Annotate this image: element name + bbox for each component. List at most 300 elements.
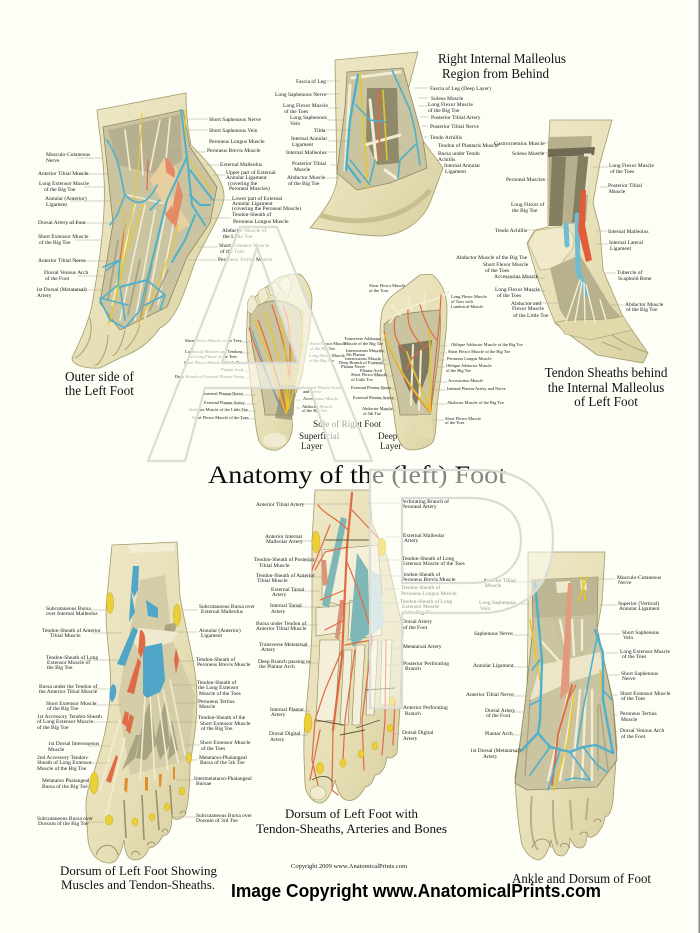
labels: outer side foot: of the Big Toe <box>44 186 76 193</box>
labels: outer side foot: (covering the <box>228 180 258 187</box>
labels: outer side foot: Short Extensor Muscle <box>38 234 89 240</box>
caption: right internal malleolus region from behind <box>438 51 566 81</box>
labels: dorsum arteries foot: of the Foot <box>403 624 428 631</box>
labels: ankle and dorsum foot: Vein <box>623 635 633 641</box>
labels: dorsum arteries foot: Tibial Muscle <box>257 578 288 584</box>
labels: ankle and dorsum foot: Peroneus Tertius <box>620 711 657 717</box>
labels: dorsum muscles foot: Subcutaneous Bursa over <box>37 816 93 822</box>
labels: sole deep layer: External Plantar Nerve <box>351 385 391 390</box>
labels: malleolus region: Ligament <box>292 142 314 148</box>
labels: sole deep layer: Long Flexor Muscle <box>451 294 487 299</box>
labels: dorsum muscles foot: Subcutaneous Bursa <box>46 606 91 612</box>
labels: sole deep layer: Peroneus Longus Muscle <box>447 356 491 361</box>
caption: outer side of the left foot <box>65 369 134 398</box>
illustration: outer side foot <box>72 93 224 368</box>
caption: sole of right foot: Layer <box>380 441 401 451</box>
labels: malleolus region: Internal Annular <box>444 163 480 169</box>
labels: dorsum muscles foot: Ligament <box>201 633 223 639</box>
labels: sole deep layer: Lumbrical Muscle <box>451 304 483 309</box>
labels: dorsum muscles foot: Tendon-Sheath of Anterior <box>42 627 101 634</box>
labels: outer side foot: 1st Dorsal (Metatarsal) <box>36 286 87 293</box>
labels: dorsum muscles foot: Peroneus Brevis Muscle <box>197 662 251 668</box>
labels: outer side foot: of the Foot <box>45 275 70 282</box>
labels: tendon sheaths foot: Posterior Tibial <box>608 183 643 189</box>
labels: dorsum arteries foot: Tendon-Sheath of Long <box>402 555 454 562</box>
labels: dorsum arteries foot: Posterior Perforating <box>403 660 449 667</box>
labels: dorsum muscles foot: the Long Extensor <box>198 685 239 691</box>
caption: dorsum of left foot showing muscles and tendon sheaths <box>60 864 218 892</box>
labels: sole deep layer: Short Flexor Muscle of the Big Toe <box>448 349 510 354</box>
labels: outer side foot: Short Saphenous Vein <box>209 128 258 134</box>
labels: dorsum muscles foot: of the Big Toe <box>37 724 69 731</box>
panel: ankle and dorsum of foot <box>466 552 671 886</box>
labels: ankle and dorsum foot: Plantar Arch <box>485 731 513 737</box>
labels: sole deep layer: of Toes with <box>451 299 474 304</box>
labels: sole superficial layer: Internal Plantar Artery <box>303 385 343 390</box>
labels: sole superficial layer: Accessorius Muscle <box>303 396 338 401</box>
labels: sole superficial layer: Short Flexor Muscle of Little Toe <box>184 360 243 365</box>
labels: sole deep layer: Interosseous Muscles <box>346 348 384 353</box>
labels: malleolus region: Tibia <box>314 128 326 134</box>
labels: malleolus region: Long Saphenous <box>290 115 327 121</box>
labels: sole deep layer: Accessorius Muscle <box>448 378 483 383</box>
labels: dorsum muscles foot: Bursae <box>196 781 212 787</box>
labels: dorsum arteries foot: Extensor Muscle <box>402 604 440 610</box>
labels: dorsum muscles foot: the Big Toe <box>47 665 73 671</box>
labels: tendon sheaths foot: Abductor and <box>511 301 541 307</box>
labels: malleolus region <box>275 78 499 187</box>
labels: dorsum arteries foot: Tendon-Sheath of Posterior <box>254 556 315 563</box>
labels: ankle and dorsum foot: Anterior Tibial Nerve <box>466 692 514 698</box>
labels: sole deep layer: Deep Branch of External <box>339 360 384 365</box>
labels: dorsum arteries foot: Bursa under Tendon of <box>256 620 307 627</box>
labels: outer side foot: Peroneus Tertius Muscle <box>218 257 273 263</box>
illustration: tendon sheaths foot <box>527 120 648 363</box>
labels: sole deep layer: Short Flexor Muscle <box>351 372 387 377</box>
labels: outer side foot: Dorsal Venous Arch <box>44 270 88 276</box>
labels: sole deep layer: Interosseous Muscle <box>345 356 381 361</box>
caption: dorsum of left foot with tendon sheaths, arteries and bones: Tendon-Sheaths, Arteries and Bones <box>256 822 447 836</box>
labels: ankle and dorsum foot: Annular Ligament <box>619 606 660 612</box>
labels: tendon sheaths foot: Abductor Muscle of the Big Toe <box>456 254 528 261</box>
panel: sole of right foot <box>175 274 523 451</box>
labels: dorsum arteries foot: Internal Plantar <box>270 707 304 713</box>
labels: sole deep layer: 5th Plantar <box>346 352 366 357</box>
labels: sole deep layer: Muscle of the Big Toe <box>344 341 383 346</box>
labels: tendon sheaths foot: Flexor Muscle <box>512 306 544 312</box>
labels: tendon sheaths foot: Long Flexor Muscle <box>495 287 540 293</box>
labels: dorsum muscles foot: Sheath of Long Extensor <box>37 759 92 766</box>
labels: sole deep layer: of the Toes <box>445 420 465 425</box>
labels: malleolus region: Long Saphenous Nerve <box>275 92 327 98</box>
caption: sole of right foot: Deep <box>378 431 398 441</box>
main title: Anatomy of the (left) Foot <box>208 460 506 489</box>
image copyright banner: Image Copyright www.AnatomicalPrints.com <box>231 880 601 901</box>
labels: sole superficial layer: External Plantar Artery <box>204 400 246 405</box>
labels: dorsum muscles foot: 2nd Accessory Tendon- <box>37 755 89 761</box>
labels: sole superficial layer: of Long Flexor of the Toes <box>190 354 237 359</box>
labels: dorsum arteries foot: Extensor Muscle of the Toes <box>402 560 465 567</box>
labels: dorsum muscles foot: Metatarso Phalangeal <box>42 778 90 784</box>
labels: ankle and dorsum foot: Long Saphenous <box>479 600 516 606</box>
labels: malleolus region: Tendo Achillis <box>430 135 462 141</box>
labels: outer side foot: Peroneus Brevis Muscle <box>207 148 261 154</box>
labels: outer side foot: Nerve <box>46 158 60 164</box>
labels: dorsum muscles foot: Short Extensor Muscle <box>46 701 97 707</box>
labels: dorsum arteries foot: Branch <box>405 666 421 672</box>
labels: sole deep layer: of the Toes <box>369 288 389 293</box>
labels: dorsum arteries foot: Dorsal Digital <box>402 730 434 736</box>
labels: dorsum arteries foot: Internal Tarsal <box>270 603 302 609</box>
labels: ankle and dorsum foot: of the Toes <box>622 653 646 660</box>
panel: tendon sheaths behind the internal malleolus <box>456 120 668 409</box>
labels: ankle and dorsum foot: Nerve <box>622 676 636 682</box>
labels: ankle and dorsum foot: Long Extensor Muscle <box>620 649 671 655</box>
caption: ankle and dorsum of foot: Ankle and Dorsum of Foot <box>512 871 651 886</box>
labels: dorsum muscles foot: Intermetatarso-Phalangeal <box>194 776 252 782</box>
labels: dorsum muscles foot: Dorsum of 3rd Toe <box>196 817 238 824</box>
labels: tendon sheaths foot: Internal Lateral <box>609 240 644 246</box>
labels: sole superficial layer: Deep Branch of External Plantar Nerve <box>175 374 244 379</box>
labels: outer side foot: Upper part of External <box>226 169 276 176</box>
labels: malleolus region: Posterior Tibial Artery <box>431 115 481 121</box>
labels: ankle and dorsum foot: Short Extensor Muscle <box>620 691 671 697</box>
labels: tendon sheaths foot: of the Big Toe <box>626 306 658 313</box>
labels: outer side foot: Tendon-Sheath of <box>232 211 271 218</box>
labels: outer side foot: Annular (Anterior) <box>45 195 87 202</box>
caption: dorsum of left foot showing muscles and tendon sheaths: Muscles and Tendon-Sheaths. <box>61 878 215 892</box>
labels: ankle and dorsum foot: 1st Dorsal (Metatarsal) <box>470 747 521 754</box>
caption: sole of right foot: Superficial <box>299 431 340 441</box>
labels: sole deep layer: Oblique Adductor Muscle of the Big Toe <box>451 342 523 347</box>
labels: dorsum muscles foot: Subcutaneous Bursa over <box>196 813 252 819</box>
labels: dorsum arteries foot: Peroneal Artery <box>402 504 437 510</box>
labels: dorsum arteries foot: Metatarsal Artery <box>403 644 442 650</box>
watermark: AP logo <box>148 227 553 708</box>
labels: outer side foot: Anterior Tibial Muscle <box>38 171 89 177</box>
labels: outer side foot: Lower part of External <box>232 195 283 202</box>
labels: malleolus region: Internal Malleolus <box>286 150 326 156</box>
labels: dorsum arteries foot: Anterior Tibial Muscle <box>256 626 307 632</box>
caption: outer side of the left foot: Outer side of <box>65 369 134 384</box>
panel: right internal malleolus region <box>275 51 566 236</box>
labels: dorsum arteries foot: Artery <box>272 592 287 598</box>
labels: dorsum arteries foot: of the Big Toe <box>402 609 434 616</box>
labels: dorsum muscles foot: Tendon-Sheath of <box>196 656 235 663</box>
labels: dorsum muscles foot: Tibial Muscle <box>50 633 81 639</box>
labels: dorsum muscles foot: Tendon-Sheath of the <box>198 714 246 721</box>
labels: dorsum muscles foot: of the Big Toe <box>201 725 233 732</box>
labels: tendon sheaths foot: Short Flexor Muscle <box>483 262 529 268</box>
labels: malleolus region: Ligament <box>445 169 467 175</box>
labels: dorsum muscles foot: Bursa under the Tendon of <box>39 683 98 690</box>
labels: dorsum muscles foot: Annular (Anterior) <box>199 627 241 634</box>
labels: sole deep layer: Internal Plantar Artery and Nerve <box>447 386 506 391</box>
labels: dorsum muscles foot: Muscle <box>199 704 216 710</box>
labels: outer side foot: of the Big Toe <box>39 239 71 246</box>
labels: sole deep layer: Short Flexor Muscle <box>369 283 405 288</box>
labels: outer side foot: Artery <box>37 293 52 299</box>
labels: ankle and dorsum foot: Short Saphenous <box>621 671 658 677</box>
labels: outer side foot <box>36 117 301 299</box>
labels: tendon sheaths foot: of the Toes <box>497 292 521 299</box>
labels: dorsum muscles foot: Muscle of the Toes <box>199 690 241 697</box>
labels: sole superficial layer: and Nerve <box>303 389 321 394</box>
caption: sole of right foot: Layer <box>301 441 322 451</box>
labels: dorsum arteries foot: Peroneus Brevis Muscle <box>402 577 456 583</box>
caption: right internal malleolus region from behind: Region from Behind <box>442 66 549 81</box>
labels: tendon sheaths foot: Tendo Achillis <box>495 228 527 234</box>
labels: dorsum arteries foot: Dorsal Artery <box>402 619 432 625</box>
labels: dorsum muscles foot: Subcutaneous Bursa over <box>199 604 255 610</box>
illustration: deep layer sole <box>380 274 449 450</box>
labels: ankle and dorsum foot <box>466 575 671 760</box>
labels: ankle and dorsum foot: Dorsal Artery <box>485 708 515 714</box>
labels: ankle and dorsum foot: Artery <box>483 754 498 760</box>
labels: ankle and dorsum foot: Saphenous Nerve <box>474 631 513 637</box>
labels: tendon sheaths foot: of the Little Toe <box>513 312 549 319</box>
labels: tendon sheaths foot: Gastrocnemius Muscle <box>494 141 545 147</box>
labels: dorsum arteries foot: Peroneus Longus Muscle <box>401 591 457 597</box>
panel: outer side of the left foot <box>36 93 301 398</box>
labels: outer side foot: Peroneus Longus Muscle <box>233 219 289 225</box>
labels: ankle and dorsum foot: Vein <box>480 606 490 612</box>
labels: sole superficial layer: Plantar Arch <box>221 367 244 372</box>
labels: outer side foot: Short Extensor Muscle <box>219 243 270 249</box>
labels: ankle and dorsum foot: Superior (Vertical) <box>618 600 659 607</box>
labels: dorsum arteries foot: External Tarsal <box>271 587 305 593</box>
labels: dorsum muscles foot: 1st Accessory Tendon-Sheath <box>37 714 102 720</box>
labels: sole superficial layer: of the Big Toe <box>309 358 334 363</box>
labels: dorsum muscles foot: Extensor Muscle of <box>47 659 90 666</box>
labels: outer side foot: Short Saphenous Nerve <box>209 117 261 123</box>
caption: dorsum of left foot with tendon sheaths, arteries and bones: Dorsum of Left Foot with <box>285 807 419 821</box>
labels: malleolus region: Achillis <box>438 157 455 163</box>
labels: sole deep layer: Plantar Nerve <box>341 364 365 369</box>
labels: malleolus region: Tendon of Plantaris Muscle <box>438 142 499 149</box>
labels: sole superficial layer: Abductor Muscle <box>302 404 333 409</box>
labels: tendon sheaths foot: Ligament <box>610 246 632 252</box>
labels: malleolus region: Abductor Muscle <box>287 175 326 181</box>
labels: sole superficial layer: Abductor Muscle of the Little Toe <box>188 407 248 412</box>
labels: sole superficial layer: Long Flexor Muscle <box>309 353 345 358</box>
labels: dorsum muscles foot: Tendon-Sheath of <box>197 679 236 686</box>
labels: ankle and dorsum foot: of the Foot <box>486 712 511 719</box>
caption: right internal malleolus region from behind: Right Internal Malleolus <box>438 51 566 66</box>
labels: outer side foot: Peroneal Muscles) <box>229 185 270 192</box>
labels: tendon sheaths foot: Muscle <box>609 189 626 195</box>
labels: outer side foot: (covering the Peroneal Muscle) <box>232 205 301 212</box>
caption: tendon sheaths behind the internal malleolus <box>545 365 668 409</box>
labels: tendon sheaths foot: Internal Malleolus <box>608 229 648 235</box>
labels: dorsum arteries foot: Artery <box>271 712 286 718</box>
labels: malleolus region: Internal Annular <box>291 136 327 142</box>
labels: tendon sheaths foot: of the Toes <box>610 168 634 175</box>
labels: sole deep layer: Abductor Muscle <box>362 406 393 411</box>
caption: tendon sheaths behind the internal malleolus: of Left Foot <box>574 394 638 409</box>
labels: dorsum arteries foot: Deep Branch passing to <box>258 659 311 665</box>
labels: dorsum muscles foot: Bursa of the Big Toe <box>42 783 88 790</box>
labels: sole deep layer: Abductor Muscle of the Big Toe <box>447 400 504 405</box>
labels: ankle and dorsum foot: Short Saphenous <box>622 630 659 636</box>
labels: dorsum muscles foot: Tendon-Sheath of Long <box>46 654 98 661</box>
labels: dorsum arteries foot <box>254 498 465 743</box>
labels: sole superficial layer: Short Flexor Muscle of the Toes <box>192 415 249 420</box>
labels: malleolus region: Bursa under Tendo <box>438 151 480 157</box>
panel: dorsum of left foot with tendon sheaths, arteries and bones <box>254 490 465 836</box>
labels: dorsum arteries foot: Malleolar Artery <box>266 539 303 545</box>
labels: ankle and dorsum foot: Annular Ligament <box>473 663 514 669</box>
labels: dorsum arteries foot: Artery <box>270 737 285 743</box>
labels: malleolus region: Posterior Tibial <box>292 161 327 167</box>
labels: dorsum arteries foot: Tibial Muscle <box>259 563 290 569</box>
labels: dorsum muscles foot: Dorsum of the Big Toe <box>38 820 89 827</box>
labels: outer side foot: Annular Ligament <box>226 175 267 181</box>
labels: sole deep layer: Plantar Arch <box>360 368 383 373</box>
labels: dorsum muscles foot: 1st Dorsal Interosseous <box>48 741 99 747</box>
illustration: dorsum arteries foot <box>304 490 403 803</box>
caption: tendon sheaths behind the internal malleolus: the Internal Malleolus <box>548 380 664 395</box>
labels: dorsum arteries foot: External Malleolar <box>403 533 445 539</box>
illustration: superficial layer sole <box>247 274 312 450</box>
labels: malleolus region: Muscle <box>294 167 311 173</box>
labels: sole deep layer: Oblique Adductor Muscle <box>446 363 492 368</box>
labels: dorsum muscles foot: Short Extensor Muscle <box>200 740 251 746</box>
labels: dorsum muscles foot: Muscle <box>48 747 65 753</box>
labels: outer side foot: Long Extensor Muscle <box>39 181 90 187</box>
caption: dorsum of left foot with tendon sheaths, arteries and bones <box>256 807 447 836</box>
labels: malleolus region: Vein <box>290 121 300 127</box>
labels: malleolus region: of the Big Toe <box>428 107 460 114</box>
labels: outer side foot: Ligament <box>46 202 68 208</box>
labels: dorsum muscles foot: of the Big Toe <box>47 705 79 712</box>
labels: sole deep layer: Short Flexor Muscle <box>445 416 481 421</box>
labels: malleolus region: Long Flexor Muscle <box>283 103 328 109</box>
labels: tendon sheaths foot: of the Toes <box>485 267 509 274</box>
illustration: malleolus region <box>310 52 443 236</box>
labels: dorsum muscles foot: of the Toes <box>201 745 225 752</box>
labels: tendon sheaths foot: Long Flexor of <box>511 201 544 208</box>
labels: tendon sheaths foot: Accessorius Muscle <box>494 274 539 280</box>
labels: dorsum muscles foot: Metatarso-Phalangeal <box>199 755 247 761</box>
labels: dorsum arteries foot: Tendon-Sheath of <box>401 571 440 578</box>
labels: ankle and dorsum foot: Anterior Tibial <box>483 578 516 584</box>
labels: dorsum arteries foot: Artery <box>403 736 418 742</box>
labels: malleolus region: of the Big Toe <box>288 180 320 187</box>
labels: sole deep layer: of 5th Toe <box>363 411 381 416</box>
labels: sole deep layer <box>339 283 523 425</box>
caption: sole of right foot: Sole of Right Foot <box>313 419 382 429</box>
labels: ankle and dorsum foot: Dorsal Venous Arch <box>620 728 664 734</box>
labels: dorsum muscles foot: Short Extensor Muscle <box>200 721 251 727</box>
labels: outer side foot: Anterior Tibial Nerve <box>38 258 86 264</box>
caption: dorsum of left foot showing muscles and tendon sheaths: Dorsum of Left Foot Showing <box>60 864 218 878</box>
labels: tendon sheaths foot: Abductor Muscle <box>625 302 664 308</box>
labels: dorsum arteries foot: Perforating Branch of <box>401 498 449 505</box>
labels: dorsum arteries foot: Artery <box>261 647 276 653</box>
labels: sole superficial layer: Short Flexor Muscle <box>310 341 346 346</box>
labels: dorsum arteries foot: Tendon-Sheath of Anterior <box>256 572 315 579</box>
labels: ankle and dorsum foot: Musculo-Cutaneous <box>617 575 661 581</box>
labels: tendon sheaths foot: Long Flexor Muscle <box>609 163 654 169</box>
labels: sole superficial layer: Short Flexor Muscle of the Toes <box>185 338 242 343</box>
labels: dorsum arteries foot: Anterior Perforating <box>403 704 448 711</box>
labels: outer side foot: Peroneus Longus Muscle <box>209 139 265 145</box>
labels: tendon sheaths foot: Peroneal Muscles <box>506 177 545 183</box>
labels: outer side foot: Dorsal Artery of Foot <box>38 219 86 226</box>
labels: outer side foot: the Little Toe <box>223 234 253 240</box>
labels: dorsum muscles foot: over Internal Malleolus <box>46 611 98 617</box>
labels: sole deep layer: External Plantar Artery <box>353 395 395 400</box>
caption: sole of right foot <box>299 419 401 451</box>
labels: malleolus region: Fascia of Leg <box>296 78 326 85</box>
labels: malleolus region: Long Flexor Muscle <box>428 102 473 108</box>
caption: tendon sheaths behind the internal malleolus: Tendon Sheaths behind <box>545 365 668 380</box>
labels: dorsum arteries foot: Anterior Internal <box>265 534 303 540</box>
labels: ankle and dorsum foot: Muscle <box>485 583 502 589</box>
labels: dorsum muscles foot: Bursa of the 5th Toe <box>200 759 245 766</box>
labels: tendon sheaths foot: Tubercle of <box>617 269 642 276</box>
labels: dorsum arteries foot: Tendon-Sheath of <box>401 584 440 591</box>
labels: tendon sheaths foot: the Big Toe <box>512 208 538 214</box>
labels: malleolus region: Soleus Muscle <box>431 96 464 102</box>
labels: dorsum arteries foot: Artery <box>404 538 419 544</box>
labels: dorsum arteries foot: Anterior Tibial Artery <box>256 502 305 508</box>
labels: malleolus region: Fascia of Leg (Deep Layer) <box>430 85 491 92</box>
panel: dorsum of left foot showing muscles and tendon sheaths <box>37 542 255 892</box>
labels: sole superficial layer: of the Big Toe <box>310 346 335 351</box>
labels: sole superficial layer: Internal Plantar Nerve <box>204 391 243 396</box>
labels: outer side foot: External Malleolus <box>220 162 262 168</box>
labels: tendon sheaths foot: Scaphoid Bone <box>618 276 652 282</box>
labels: dorsum muscles foot: the Anterior Tibial Muscle <box>39 689 98 695</box>
labels: dorsum arteries foot: the Plantar Arch <box>259 664 295 670</box>
labels: malleolus region: of the Toes <box>284 108 308 115</box>
labels: ankle and dorsum foot: Muscle <box>621 717 638 723</box>
labels: ankle and dorsum foot: Nerve <box>618 580 632 586</box>
labels: malleolus region: Posterior Tibial Nerve <box>430 124 479 130</box>
labels: sole superficial layer <box>175 338 346 420</box>
labels: dorsum arteries foot: Tendon-Sheath of Long <box>400 598 452 605</box>
labels: outer side foot: of the Toes <box>220 248 244 255</box>
labels: dorsum arteries foot: Transverse Metatarsal <box>259 642 308 648</box>
caption: outer side of the left foot: the Left Foot <box>65 383 134 398</box>
labels: dorsum muscles foot <box>37 604 255 827</box>
copyright line: Copyright 2009 www.AnatomicalPrints.com <box>291 863 407 870</box>
labels: dorsum muscles foot: Muscle of the Big Toe <box>37 765 87 772</box>
labels: ankle and dorsum foot: of the Toes <box>621 695 645 702</box>
illustration: dorsum muscles foot <box>86 542 197 863</box>
labels: sole superficial layer: Lumbrical Muscles and Tendons <box>185 349 243 354</box>
labels: outer side foot: Annular Ligament <box>232 201 273 207</box>
labels: outer side foot: Musculo-Cutaneous <box>46 152 90 158</box>
labels: sole deep layer: of the Big Toe <box>446 368 471 373</box>
labels: tendon sheaths foot: Soleus Muscle <box>512 151 545 157</box>
labels: dorsum arteries foot: Branch <box>405 711 421 717</box>
labels: dorsum arteries foot: Dorsal Digital <box>269 731 301 737</box>
labels: outer side foot: Abductor Muscle of <box>222 227 266 234</box>
labels: sole superficial layer: of the Big Toe <box>302 408 327 413</box>
labels: ankle and dorsum foot: of the Foot <box>621 733 646 740</box>
labels: tendon sheaths foot <box>456 141 664 319</box>
labels: dorsum muscles foot: Peroneus Tertius <box>198 699 235 705</box>
labels: dorsum muscles foot: of Long Extensor Muscle <box>37 718 94 725</box>
illustration: ankle and dorsum foot <box>515 552 617 860</box>
labels: sole deep layer: Transverse Adductor <box>344 336 381 341</box>
labels: dorsum arteries foot: Artery <box>271 609 286 615</box>
labels: dorsum muscles foot: External Malleolus <box>201 609 243 615</box>
labels: sole deep layer: of Little Toe <box>351 377 373 382</box>
